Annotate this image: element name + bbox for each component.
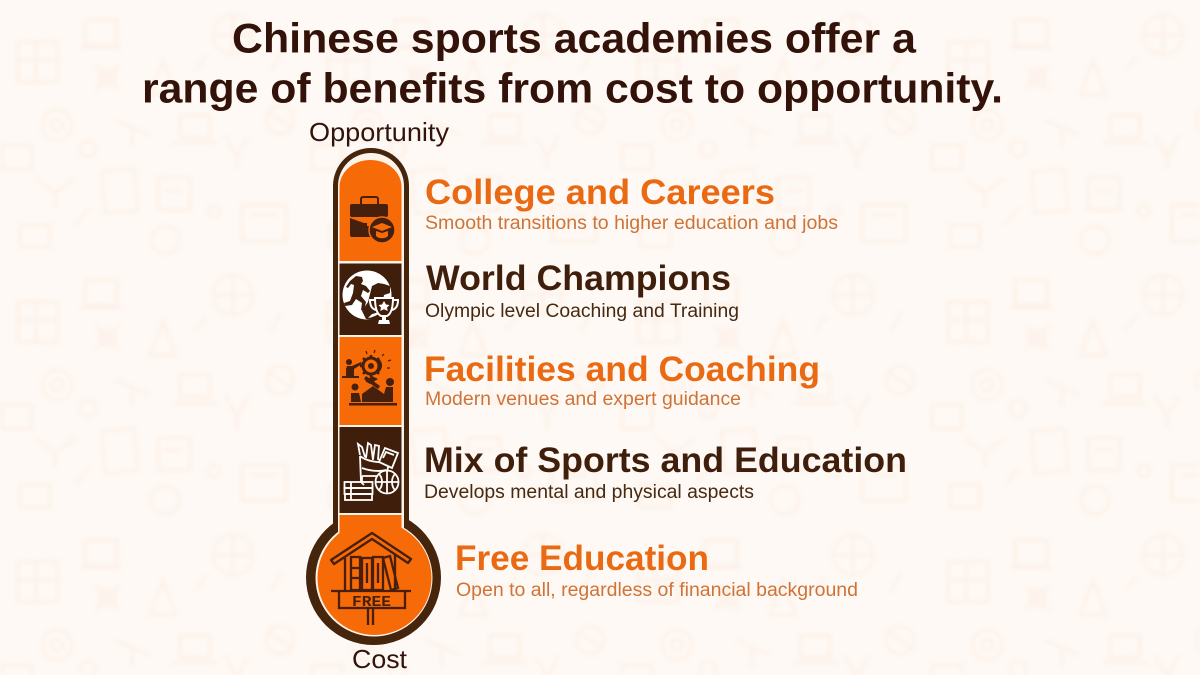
level: world champions bbox=[425, 259, 739, 322]
level: mix of sports and education: Mix of Sports and Education bbox=[424, 441, 907, 480]
level: mix of sports and education: Develops mental and physical aspects bbox=[424, 482, 754, 503]
icon: books, pencils and basketball bbox=[344, 443, 398, 500]
level: college and careers: Smooth transitions to higher education and jobs bbox=[425, 213, 838, 234]
level: college and careers: College and Careers bbox=[425, 173, 775, 212]
icon: coaching gear and people bbox=[342, 350, 397, 406]
icon: free education house: FREE bbox=[352, 595, 391, 611]
segment: facilities and coaching bbox=[340, 337, 402, 425]
level: facilities and coaching: Modern venues and expert guidance bbox=[425, 389, 741, 410]
level: world champions: Olympic level Coaching and Training bbox=[425, 301, 739, 322]
level: free education: Free Education bbox=[455, 539, 709, 578]
title: range of benefits from cost to opportunity. bbox=[142, 64, 1003, 112]
level: mix of sports and education bbox=[424, 441, 907, 503]
title bbox=[142, 14, 1003, 112]
thermometer outline bbox=[306, 148, 441, 645]
icon: briefcase with graduation cap bbox=[350, 197, 395, 243]
segment: world champions bbox=[340, 264, 402, 335]
level: facilities and coaching: Facilities and Coaching bbox=[424, 350, 820, 389]
segment: mix of sports and education bbox=[340, 427, 402, 513]
level: college and careers bbox=[425, 173, 838, 234]
thermometer bbox=[306, 148, 441, 645]
level: world champions: World Champions bbox=[426, 259, 731, 298]
axis label: opportunity: Opportunity bbox=[309, 117, 449, 147]
thermometer inner line bbox=[316, 153, 432, 636]
axis label: cost: Cost bbox=[352, 644, 408, 674]
level: free education: Open to all, regardless of financial background bbox=[456, 580, 858, 601]
level: facilities and coaching bbox=[424, 350, 820, 410]
level: free education bbox=[455, 539, 858, 601]
segment: college and careers bbox=[340, 160, 402, 261]
title: Chinese sports academies offer a bbox=[232, 14, 917, 62]
icon: globe with runner and trophy bbox=[342, 270, 398, 324]
icon: free education house bbox=[331, 533, 411, 625]
segment: bulb bbox=[318, 515, 432, 635]
